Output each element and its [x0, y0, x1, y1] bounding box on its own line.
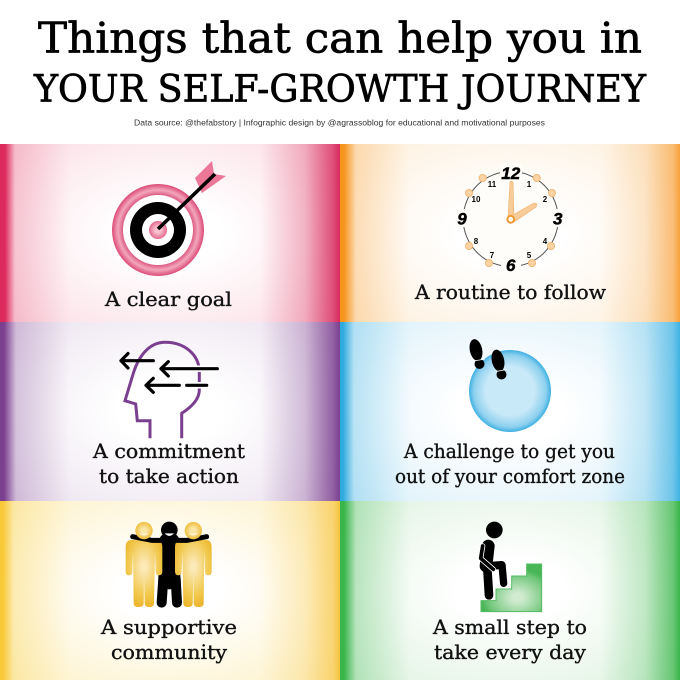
label: take every day: take every day — [434, 641, 586, 664]
icon: clock: 3 — [553, 210, 563, 228]
label: to take action: to take action — [99, 465, 239, 488]
icon: clock: 2 — [543, 195, 548, 204]
title line 1: Things that can help you in — [38, 15, 642, 64]
panel: a small step — [340, 501, 680, 680]
label: a commitment: A commitment — [92, 440, 245, 463]
icon: person climbing stairs — [481, 522, 542, 612]
icon: clock — [456, 164, 564, 275]
panel: a challenge — [340, 322, 680, 501]
icon: clock: 6 — [506, 256, 516, 275]
panel: a supportive community — [0, 501, 340, 680]
icon: clock: 11 — [488, 180, 497, 189]
icon: target with arrow — [112, 161, 226, 276]
header — [33, 15, 647, 128]
icon: head with arrows — [121, 342, 217, 438]
label: out of your comfort zone: out of your comfort zone — [395, 465, 625, 488]
icon: circle with footprints — [468, 338, 551, 432]
title line 2: YOUR SELF-GROWTH JOURNEY — [33, 68, 647, 111]
label: a small step to: A small step to — [432, 616, 587, 639]
panel: a commitment to take action — [0, 322, 340, 501]
label: community: community — [111, 641, 227, 664]
icon: clock: 7 — [490, 251, 495, 260]
icon: clock: 9 — [457, 210, 467, 228]
label: a challenge to get you: A challenge to get you — [403, 440, 615, 463]
panel: a routine to follow — [340, 144, 680, 322]
icon: clock: 8 — [474, 237, 479, 246]
panel: a clear goal — [0, 144, 340, 322]
icon: clock: 4 — [543, 237, 548, 246]
icon: clock: 10 — [472, 195, 481, 204]
label: a supportive: A supportive — [100, 616, 237, 639]
icon: three people — [126, 522, 212, 607]
label: a clear goal: A clear goal — [104, 288, 232, 311]
icon: clock: 12 — [501, 164, 521, 183]
source line: Data source: @thefabstory | Infographic design by @agrassoblog for educational and motivational purposes — [134, 118, 545, 128]
icon: clock: 1 — [527, 180, 532, 189]
label: a routine to follow: A routine to follow — [414, 281, 606, 304]
icon: clock: 5 — [527, 251, 532, 260]
